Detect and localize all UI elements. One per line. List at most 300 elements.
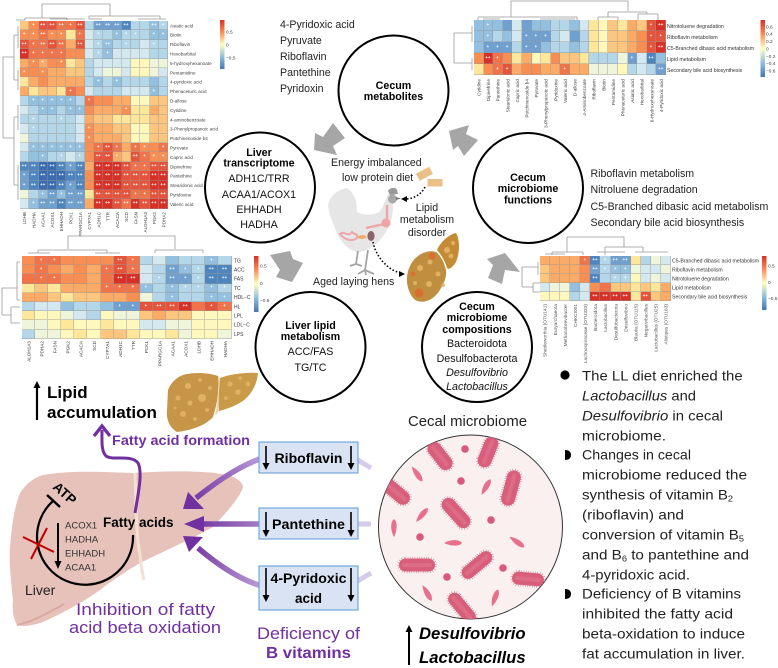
row and column labels: LDHB bbox=[197, 341, 202, 354]
row and column labels: Stearidonic acid bbox=[170, 183, 203, 188]
heatmap cells: + bbox=[23, 172, 25, 177]
colour scale bbox=[254, 256, 270, 312]
colour scale: 0.6 bbox=[766, 24, 773, 30]
heatmap cells: ++ bbox=[58, 41, 64, 46]
heatmap cells: + bbox=[32, 200, 35, 205]
function list: Riboflavin metabolism bbox=[590, 168, 694, 180]
circle: cecum microbiome compositions: Lactobacillus bbox=[446, 381, 509, 393]
row and column labels: Cytidine bbox=[476, 79, 482, 96]
microbiome output arrows bbox=[356, 459, 371, 582]
row and column labels: ACACA bbox=[115, 211, 120, 228]
dendrograms bbox=[454, 0, 658, 70]
heatmap cells: + bbox=[78, 144, 81, 149]
row and column labels: ACOX1 bbox=[184, 341, 188, 357]
heatmap cells: + bbox=[41, 153, 44, 158]
heatmap cells: ++ bbox=[133, 182, 138, 187]
circle: cecum microbiome compositions bbox=[422, 292, 532, 402]
heatmap cells: ++ bbox=[96, 153, 101, 158]
heatmap cells: ++ bbox=[592, 257, 598, 262]
up arrow: lipid accumulation bbox=[34, 381, 40, 420]
heatmap cells: ++ bbox=[592, 293, 598, 298]
heatmap cells: ++ bbox=[77, 182, 82, 187]
heatmap cells: + bbox=[51, 106, 53, 111]
heatmap cells: ++ bbox=[151, 191, 157, 196]
colour scale bbox=[762, 256, 778, 310]
heatmap cells: + bbox=[506, 66, 508, 71]
heatmap cells: + bbox=[32, 144, 35, 149]
heatmap cells: + bbox=[134, 31, 137, 36]
heatmap cells: ++ bbox=[133, 153, 138, 158]
heatmap cells: ++ bbox=[77, 172, 82, 177]
row and column labels: D-allose bbox=[572, 79, 578, 96]
heatmap cells: + bbox=[630, 55, 633, 60]
heatmap cells: + bbox=[60, 59, 63, 64]
heatmap cells: ++ bbox=[58, 163, 64, 168]
row and column labels: HADHA bbox=[31, 211, 36, 228]
row and column labels: LPL bbox=[234, 314, 243, 320]
heatmap cells: ++ bbox=[105, 163, 110, 168]
heatmap cells: + bbox=[184, 284, 187, 289]
row and column labels: Lactobacillus (OTU25) bbox=[654, 304, 660, 352]
heatmap cells: + bbox=[23, 69, 25, 74]
heatmap cells: ++ bbox=[485, 55, 491, 60]
heatmap cells: + bbox=[210, 257, 213, 262]
circle: cecum metabolites bbox=[338, 36, 448, 146]
row and column labels: ADH1C bbox=[118, 340, 123, 357]
icon: fatty liver of hen bbox=[407, 233, 459, 302]
heatmap cells: ++ bbox=[160, 172, 166, 177]
row and column labels: Stearidonic acid bbox=[505, 79, 510, 112]
heatmap cells: ++ bbox=[40, 31, 45, 36]
heatmap cells: + bbox=[184, 275, 187, 280]
heatmap cells: ++ bbox=[105, 153, 110, 158]
heatmap cells: + bbox=[115, 31, 118, 36]
row and column labels: ALDH1A3 bbox=[143, 212, 148, 232]
summary bullets: and B bbox=[582, 546, 619, 562]
heatmap cells: + bbox=[145, 303, 147, 308]
heatmap cells: ++ bbox=[123, 182, 129, 187]
metabolite list: Riboflavin bbox=[280, 51, 327, 63]
heatmap cells: + bbox=[496, 66, 499, 71]
arrow: transcriptome to lipid metabolism bbox=[270, 251, 303, 282]
heatmap: microbiome compositions vs functions bbox=[522, 236, 778, 363]
heatmap cells: + bbox=[23, 31, 25, 36]
row and column labels: HDL−C bbox=[234, 295, 251, 301]
caption: deficiency of B vitamins: Deficiency of bbox=[257, 624, 360, 643]
heatmap cells: + bbox=[60, 50, 63, 55]
row and column labels: Pantethine bbox=[496, 79, 501, 101]
summary bullets: 5 bbox=[739, 534, 744, 544]
heatmap cells: + bbox=[650, 22, 652, 27]
row and column labels: SCD bbox=[124, 211, 129, 222]
icon: fatty liver bbox=[167, 373, 258, 432]
enzyme list: ACAA1 bbox=[65, 562, 96, 574]
heatmap cells: + bbox=[506, 44, 508, 49]
heatmap cells: + bbox=[32, 22, 35, 27]
heatmap cells: + bbox=[40, 257, 42, 262]
heatmap cells: ++ bbox=[114, 182, 119, 187]
heatmap cells: + bbox=[535, 44, 537, 49]
heatmap cells: ++ bbox=[123, 200, 129, 205]
row and column labels: TTR bbox=[131, 340, 136, 350]
heatmap cells: + bbox=[40, 275, 42, 280]
heatmap cells: ++ bbox=[68, 191, 73, 196]
row and column labels: Riboflavin bbox=[170, 42, 191, 47]
enriched genera labels: Desulfovibrio bbox=[419, 624, 526, 643]
row and column labels: Euryarchaeota bbox=[553, 304, 559, 335]
enzyme list: HADHA bbox=[65, 534, 99, 546]
heatmap cells: + bbox=[51, 50, 53, 55]
heatmap cells: + bbox=[41, 191, 44, 196]
row and column labels: Dipivefrine bbox=[170, 164, 192, 169]
heatmap cells: ++ bbox=[77, 41, 82, 46]
heatmap cells: + bbox=[60, 153, 63, 158]
summary bullets: microbiome. bbox=[582, 428, 666, 444]
caption: deficiency of B vitamins bbox=[257, 624, 360, 662]
heatmap cells: ++ bbox=[96, 163, 101, 168]
heatmap cells: ++ bbox=[151, 200, 157, 205]
summary bullets: inhibited the fatty acid bbox=[582, 606, 733, 622]
row and column labels: 3-Phenylpropanoic acid bbox=[544, 79, 549, 128]
caption: inhibition of fatty acid beta oxidation: Inhibition of fatty bbox=[76, 600, 216, 619]
heatmap cells: + bbox=[97, 50, 100, 55]
row and column labels: LDL−C bbox=[234, 323, 250, 329]
row and column labels: Hexobarbital bbox=[170, 52, 196, 56]
heatmap cells: ++ bbox=[142, 172, 147, 177]
enzyme list bbox=[65, 520, 105, 574]
summary bullets: 4-pyridoxic acid. bbox=[582, 566, 690, 582]
heatmap cells: ++ bbox=[77, 191, 82, 196]
heatmap cells: + bbox=[131, 303, 134, 308]
heatmap cells: + bbox=[223, 303, 226, 308]
icon: feed pellets bbox=[416, 167, 442, 186]
arrow: metabolites to transcriptome bbox=[314, 123, 345, 155]
heatmap cells: ++ bbox=[182, 303, 188, 308]
heatmap cells: ++ bbox=[160, 191, 166, 196]
heatmap cells: ++ bbox=[169, 303, 175, 308]
heatmap cells: + bbox=[125, 31, 127, 36]
row and column labels bbox=[543, 256, 778, 363]
circle: liver transcriptome: ADH1C/TRR bbox=[228, 173, 290, 185]
heatmap cells: ++ bbox=[40, 163, 45, 168]
heatmap cells: + bbox=[115, 144, 118, 149]
bullet markers bbox=[560, 370, 571, 599]
dendrograms bbox=[2, 236, 204, 324]
heatmap cells: ++ bbox=[658, 22, 663, 27]
heatmap cells: + bbox=[69, 106, 72, 111]
heatmap cells: + bbox=[496, 55, 499, 60]
row and column labels: Pyruvate bbox=[534, 79, 539, 98]
heatmap cells: ++ bbox=[49, 41, 55, 46]
heatmap cells: ++ bbox=[142, 182, 147, 187]
row and column labels: Lactobacillus bbox=[603, 303, 609, 332]
heatmap cells: + bbox=[88, 97, 90, 102]
row and column labels: ACC bbox=[234, 268, 245, 274]
row and column labels bbox=[22, 20, 236, 237]
hens label: Aged laying hens bbox=[313, 276, 394, 288]
red cross: blocked step bbox=[23, 528, 54, 559]
heatmap cells bbox=[20, 21, 168, 209]
row and column labels: 4-Pyridoxic acid bbox=[659, 79, 664, 112]
heatmap cells: + bbox=[584, 257, 586, 262]
colour scale: 0.5 bbox=[226, 30, 233, 36]
row and column labels: EHHADH bbox=[59, 212, 64, 231]
colour scale: −0.6 bbox=[766, 68, 776, 74]
arrow: functions to metabolites bbox=[449, 125, 478, 156]
circle: liver transcriptome bbox=[205, 132, 315, 242]
heatmap cells: + bbox=[32, 125, 35, 130]
circle: cecum microbiome compositions: Desulfovibrio bbox=[446, 367, 508, 379]
row and column labels: 4-pyridoxic acid bbox=[170, 80, 202, 85]
heatmap cells: ++ bbox=[123, 191, 129, 196]
heatmap cells: + bbox=[143, 191, 146, 196]
heatmap cells: ++ bbox=[105, 144, 110, 149]
icon: laying hen bbox=[328, 188, 401, 275]
row and column labels: Asiatic acid bbox=[630, 79, 635, 103]
heatmap cells: ++ bbox=[40, 200, 45, 205]
heatmap cells: + bbox=[131, 284, 134, 289]
heatmap cells: + bbox=[131, 257, 134, 262]
circle: cecum microbiome compositions: Desulfobacterota bbox=[437, 353, 517, 365]
row and column labels: FASN bbox=[52, 341, 58, 353]
heatmap cells: + bbox=[105, 284, 108, 289]
heatmap cells: + bbox=[97, 78, 100, 83]
heatmap cells: ++ bbox=[658, 44, 663, 49]
summary bullets: Deficiency of B vitamins bbox=[582, 586, 741, 602]
heatmap cells: ++ bbox=[96, 200, 101, 205]
circle: cecum microbiome functions: microbiome bbox=[498, 183, 558, 195]
heatmap: cecum metabolites vs microbiome functions bbox=[454, 0, 776, 128]
heatmap cells: ++ bbox=[58, 172, 64, 177]
row and column labels: Lipid metabolism bbox=[667, 57, 706, 63]
heatmap cells: ++ bbox=[114, 22, 119, 27]
heatmap cells: ++ bbox=[96, 182, 101, 187]
colour scale bbox=[220, 20, 236, 69]
row and column labels: FAS bbox=[234, 277, 244, 283]
row and column labels: ALDH1A3 bbox=[26, 341, 31, 362]
heatmap cells: + bbox=[41, 59, 44, 64]
heatmap cells: ++ bbox=[151, 172, 157, 177]
heatmap cells: + bbox=[487, 33, 489, 38]
heatmap cells: ++ bbox=[58, 200, 64, 205]
caption: inhibition of fatty acid beta oxidation: acid beta oxidation bbox=[69, 618, 221, 637]
heatmap cells: ++ bbox=[77, 200, 82, 205]
heatmap cells: ++ bbox=[222, 275, 227, 280]
heatmap cells: + bbox=[145, 284, 147, 289]
heatmap cells: + bbox=[162, 144, 164, 149]
lipid metabolism disorder label bbox=[400, 202, 454, 239]
row and column labels: Valeric acid bbox=[170, 202, 194, 207]
row and column labels: Pentamidine bbox=[170, 70, 196, 75]
circle: cecum microbiome compositions: Cecum bbox=[459, 301, 495, 313]
heatmap cells: ++ bbox=[209, 275, 214, 280]
heatmap cells: + bbox=[69, 97, 72, 102]
row and column labels: Pentamidine bbox=[611, 79, 616, 105]
heatmap cells: ++ bbox=[40, 182, 45, 187]
heatmap cells: ++ bbox=[117, 257, 122, 262]
box: pantethine: Pantethine bbox=[272, 517, 346, 532]
heatmap cells: + bbox=[152, 31, 155, 36]
metabolite list: Pyridoxin bbox=[280, 83, 324, 95]
heatmap cells: + bbox=[41, 144, 44, 149]
row and column labels: Riboflavin metabolism bbox=[672, 267, 723, 273]
row and column labels: CYP7A1 bbox=[105, 341, 110, 359]
row and column labels: Lipid metabolism bbox=[672, 285, 711, 291]
heatmap cells: + bbox=[69, 88, 72, 93]
circle: liver lipid metabolism: metabolism bbox=[281, 331, 340, 343]
box: 4-pyridoxic acid bbox=[259, 566, 358, 610]
dendrograms bbox=[522, 236, 668, 292]
heatmap cells: ++ bbox=[592, 275, 598, 280]
row and column labels: Dipivefrine bbox=[486, 79, 491, 101]
row and column labels: PPARGC1A bbox=[157, 340, 162, 366]
circle: liver transcriptome: HADHA bbox=[240, 219, 279, 231]
heatmap cells: ++ bbox=[222, 266, 227, 271]
row and column labels: Cytidine bbox=[170, 108, 187, 113]
heatmap cells: + bbox=[563, 66, 566, 71]
row and column labels: ACACA bbox=[79, 340, 84, 357]
circle: liver transcriptome: transcriptome bbox=[223, 158, 295, 170]
heatmap cells: ++ bbox=[114, 200, 119, 205]
lipid metabolism disorder label: Lipid bbox=[416, 202, 438, 214]
arrow: 4-pyridoxic acid to liver bbox=[183, 536, 262, 586]
heatmap cells: ++ bbox=[21, 50, 27, 55]
heatmap cells: ++ bbox=[133, 172, 138, 177]
heatmap cells bbox=[540, 256, 671, 301]
colour scale: 0 bbox=[260, 281, 263, 287]
heatmap cells: ++ bbox=[77, 163, 82, 168]
box: pantethine bbox=[259, 508, 358, 539]
heatmap cells: + bbox=[60, 116, 63, 121]
summary bullets: to pantethine and bbox=[627, 546, 749, 562]
summary bullets: microbiome reduced the bbox=[582, 466, 747, 482]
function list: Secondary bile acid biosynthesis bbox=[590, 217, 744, 229]
heatmap cells: + bbox=[115, 153, 118, 158]
heatmap cells: ++ bbox=[133, 200, 138, 205]
heatmap cells: ++ bbox=[169, 266, 175, 271]
heading: lipid accumulation: Lipid bbox=[47, 383, 88, 402]
heatmap cells: + bbox=[32, 50, 35, 55]
heatmap cells: + bbox=[32, 41, 35, 46]
heatmap cells: + bbox=[51, 144, 53, 149]
row and column labels: Alistipes (OTU163) bbox=[664, 304, 670, 345]
row and column labels: Phenaceturic acid bbox=[170, 89, 207, 94]
row and column labels: CYP7A1 bbox=[87, 212, 92, 230]
heatmap cells: ++ bbox=[209, 266, 214, 271]
arrow: diet to hen bbox=[401, 187, 425, 202]
heatmap cells: + bbox=[118, 284, 121, 289]
arrow: riboflavin to liver bbox=[183, 458, 262, 509]
heatmap cells: ++ bbox=[49, 22, 55, 27]
metabolite list: Pantethine bbox=[280, 67, 331, 79]
heatmap cells: + bbox=[614, 266, 616, 271]
row and column labels: TG bbox=[234, 258, 241, 264]
heatmap cells: ++ bbox=[96, 191, 101, 196]
heatmap cells: + bbox=[487, 22, 489, 27]
heatmap cells: + bbox=[496, 44, 499, 49]
heatmap cells: ++ bbox=[49, 182, 55, 187]
row and column labels: D-allose bbox=[170, 98, 187, 104]
summary bullets bbox=[560, 368, 749, 662]
colour scale: 0.5 bbox=[260, 264, 267, 270]
function list bbox=[590, 168, 768, 229]
circle: cecum microbiome compositions: compositions bbox=[442, 324, 512, 336]
heatmap cells: + bbox=[88, 135, 90, 140]
colour scale: 0 bbox=[766, 46, 769, 52]
heatmap cells: + bbox=[32, 31, 35, 36]
heatmap cells: + bbox=[53, 275, 56, 280]
heatmap cells: + bbox=[614, 275, 616, 280]
row and column labels: PGK2 bbox=[66, 341, 71, 354]
colour scale: −0.2 bbox=[766, 54, 776, 60]
heatmap cells: + bbox=[106, 50, 109, 55]
beta oxidation cycle bbox=[37, 479, 133, 585]
colour scale: −0.5 bbox=[226, 56, 236, 62]
rod bacteria bbox=[379, 435, 545, 626]
metabolite list: 4-Pyridoxic acid bbox=[280, 19, 355, 31]
heatmap cells: + bbox=[97, 41, 100, 46]
label: fatty acid formation: Fatty acid formation bbox=[112, 432, 250, 448]
row and column labels: Pantethine bbox=[170, 174, 192, 179]
row and column labels: HL bbox=[234, 304, 241, 310]
heatmap cells: + bbox=[88, 125, 90, 130]
enzyme list: ACOX1 bbox=[65, 520, 97, 532]
heatmap cells: ++ bbox=[21, 41, 27, 46]
row and column labels: TC bbox=[234, 286, 241, 292]
heatmap cells: + bbox=[210, 284, 213, 289]
heatmap cells: ++ bbox=[123, 172, 129, 177]
heatmap cells: + bbox=[197, 284, 200, 289]
heatmap cells: + bbox=[162, 31, 164, 36]
icon: liver bbox=[10, 471, 243, 626]
heatmap cells: + bbox=[125, 106, 127, 111]
row and column labels: Capric acid bbox=[515, 79, 520, 102]
heatmap cells: + bbox=[535, 33, 537, 38]
heatmap cells: ++ bbox=[142, 200, 147, 205]
row and column labels: TTR bbox=[106, 211, 111, 221]
circle: liver lipid metabolism bbox=[256, 292, 366, 402]
metabolite list: Pyruvate bbox=[280, 35, 322, 47]
row and column labels: Methanobrevibacter bbox=[563, 304, 569, 346]
row and column labels: Riboflavin bbox=[592, 79, 597, 100]
circle: cecum microbiome functions: functions bbox=[504, 194, 552, 206]
heatmap cells: + bbox=[650, 33, 652, 38]
row and column labels: Secondary bile acid biosynthesis bbox=[667, 68, 743, 74]
row and column labels: Pyridoxine bbox=[170, 192, 192, 198]
heatmap cells: + bbox=[197, 266, 200, 271]
heatmap: liver transcriptome vs lipid metabolism bbox=[2, 236, 270, 366]
heatmap cells: + bbox=[115, 78, 118, 83]
diet label: low protein diet bbox=[342, 172, 413, 184]
heatmap cells: ++ bbox=[117, 266, 122, 271]
heatmap cells: ++ bbox=[114, 163, 119, 168]
summary bullets: Desulfovibrio in cecal bbox=[582, 408, 723, 424]
row and column labels: Pyruvate bbox=[170, 146, 189, 150]
row and column labels bbox=[26, 256, 270, 366]
heatmap cells: + bbox=[525, 33, 528, 38]
label: liver: Liver bbox=[25, 582, 56, 598]
row and column labels: C5-Branched dibasic acid metabolism bbox=[667, 46, 754, 52]
heatmap cells: + bbox=[125, 41, 127, 46]
row and column labels: Desulfovibrio bbox=[623, 304, 629, 332]
heatmap cells: ++ bbox=[622, 257, 628, 262]
row and column labels: Valeric acid bbox=[563, 79, 568, 103]
heatmap cells: ++ bbox=[612, 293, 618, 298]
row and column labels: 3-Phenylpropanoic acid bbox=[170, 127, 218, 132]
heatmap cells: + bbox=[41, 50, 44, 55]
heatmap cells: + bbox=[41, 97, 44, 102]
row and column labels: Lachnospiraceae (OTU333) bbox=[583, 304, 589, 363]
